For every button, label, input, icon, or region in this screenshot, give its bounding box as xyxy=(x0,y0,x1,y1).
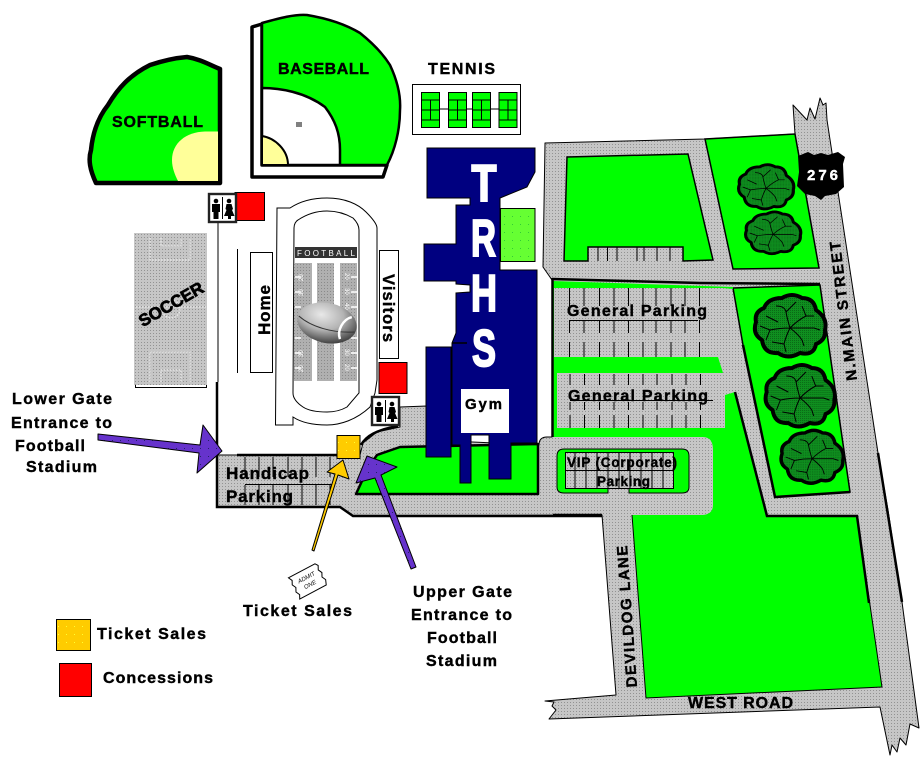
baseball infield xyxy=(262,88,340,165)
ticket icon xyxy=(288,563,328,599)
label: lower gate: Lower Gate xyxy=(12,391,112,408)
VIP corporate parking xyxy=(557,449,689,493)
restroom north xyxy=(209,194,236,222)
general parking lot 2 xyxy=(568,374,713,428)
street label: Devildog Lane: DEVILDOG LANE xyxy=(614,545,641,688)
general parking lot 1 xyxy=(567,288,707,357)
legend xyxy=(56,620,213,696)
tennis courts xyxy=(412,61,520,134)
handicap parking xyxy=(226,457,333,506)
arrow: upper gate xyxy=(356,456,416,569)
softball label: SOFTBALL xyxy=(112,114,203,131)
stadium boundary lines xyxy=(218,223,238,382)
ticket icon: ADMIT xyxy=(296,571,318,586)
pitcher mound xyxy=(296,122,302,127)
softball infield xyxy=(172,132,218,181)
lawn: top right block xyxy=(705,134,819,269)
label: upper gate: Stadium xyxy=(426,653,497,670)
VIP corporate parking: Parking xyxy=(597,474,650,489)
highway 276 shield xyxy=(797,152,845,200)
school building: R xyxy=(471,210,496,268)
general parking lot 1: General Parking xyxy=(567,303,707,320)
label: lower gate: Football xyxy=(15,438,85,455)
soccer label: SOCCER xyxy=(135,278,207,331)
lawn: lower right block xyxy=(733,285,850,497)
yard numbers xyxy=(299,273,349,372)
label: upper gate: Entrance to xyxy=(411,607,512,624)
lawn: upper lot xyxy=(564,154,713,261)
yard numbers: 20 xyxy=(343,273,349,280)
legend: concessions xyxy=(60,664,92,696)
VIP corporate parking: VIP (Corporate) xyxy=(567,455,677,470)
track and football field xyxy=(276,198,377,425)
home bleachers: Home xyxy=(255,285,274,335)
visitors bleachers xyxy=(379,250,398,358)
highway 276 shield: 276 xyxy=(807,167,838,184)
arrow: ticket sales xyxy=(312,460,349,551)
label: upper gate: Upper Gate xyxy=(413,584,512,601)
yard numbers: 30 xyxy=(343,349,349,356)
baseball label: BASEBALL xyxy=(278,61,369,78)
handicap parking: Parking xyxy=(226,487,293,506)
legend: Ticket Sales xyxy=(97,626,206,643)
label: lower gate: Entrance to xyxy=(11,415,112,432)
visitors bleachers: Visitors xyxy=(379,274,397,342)
school building: S xyxy=(472,320,496,378)
concession stand north xyxy=(235,192,264,220)
label: lower gate xyxy=(11,391,112,476)
school building xyxy=(424,148,537,483)
road and parking network xyxy=(217,98,919,755)
upper lot parking stalls xyxy=(588,247,670,261)
yard numbers: 20 xyxy=(299,274,305,281)
restroom south xyxy=(372,397,399,425)
TRHS letters: T xyxy=(472,155,497,213)
front lawn xyxy=(356,444,538,494)
yard numbers: 20 xyxy=(343,364,349,371)
yard numbers: 30 xyxy=(299,289,305,296)
field stripes xyxy=(294,263,312,381)
legend: Concessions xyxy=(103,670,213,687)
concession stand south xyxy=(379,362,407,394)
home bleachers xyxy=(250,252,274,372)
label: upper gate xyxy=(411,584,512,670)
handicap parking: Handicap xyxy=(226,464,309,483)
gym xyxy=(461,389,509,433)
courtyard xyxy=(500,208,535,262)
tennis label: TENNIS xyxy=(428,61,495,78)
yard numbers: 20 xyxy=(299,365,305,372)
label: upper gate: Football xyxy=(427,630,497,647)
school building: H xyxy=(471,265,497,323)
label: lower gate: Stadium xyxy=(26,459,97,476)
general parking lot 2: General Parking xyxy=(568,388,708,405)
road edge lines xyxy=(217,278,902,603)
street label: N. Main Street: N.MAIN STREET xyxy=(827,241,861,382)
track and football field: FOOTBALL xyxy=(297,249,356,258)
yard numbers: 40 xyxy=(343,303,349,310)
school building: Gym xyxy=(465,396,502,413)
label: ticket sales: Ticket Sales xyxy=(243,603,352,620)
soccer field xyxy=(134,233,207,388)
home plate area xyxy=(262,136,288,165)
lawn strips around general parking xyxy=(553,281,882,698)
trees xyxy=(739,165,843,483)
arrow: lower gate xyxy=(98,425,222,473)
ticket icon: ONE xyxy=(303,579,319,591)
softball field xyxy=(90,57,220,183)
legend: ticket sales xyxy=(56,620,90,650)
school wing xyxy=(426,347,451,457)
football banner xyxy=(295,247,357,258)
yard numbers: 30 xyxy=(299,350,305,357)
ticket booth xyxy=(337,436,360,458)
street label: West Road: WEST ROAD xyxy=(688,695,793,712)
yard numbers: 30 xyxy=(343,288,349,295)
curb line by ticket booth xyxy=(361,426,398,445)
baseball field xyxy=(252,15,400,177)
football xyxy=(293,297,361,349)
